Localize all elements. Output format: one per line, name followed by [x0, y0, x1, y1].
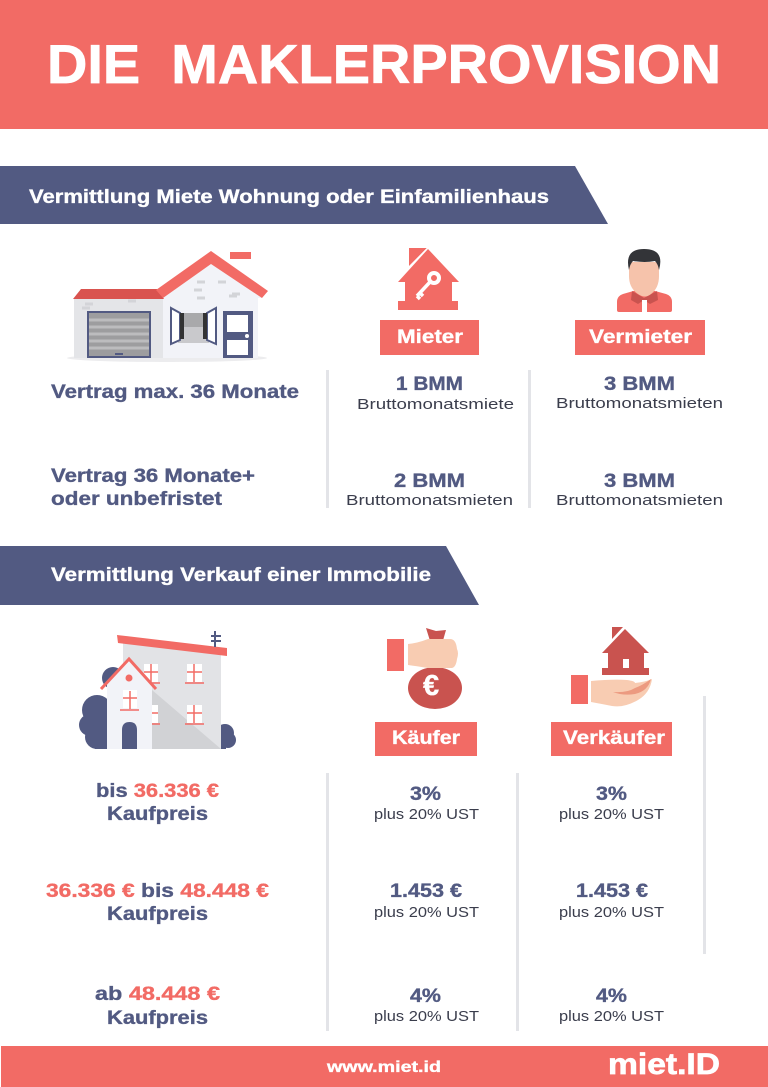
cell: Käufer 4%	[374, 986, 479, 1025]
section banner: Miete	[0, 166, 608, 224]
row label: Vertrag 36 Monate+: Vertrag 36 Monate+	[51, 466, 255, 487]
row label: ab 48.448 €: ab 48.448 €	[95, 984, 221, 1005]
section banner: Verkauf: Vermittlung Verkauf einer Immobilie	[51, 565, 431, 586]
title	[0, 0, 768, 129]
label: Käufer: Käufer	[392, 728, 461, 749]
label: Verkäufer: Verkäufer	[563, 728, 666, 749]
footer	[1, 1046, 768, 1087]
icon: landlord person	[617, 249, 672, 312]
cell: Käufer 1.453 €: plus 20% UST	[374, 904, 479, 921]
cell: Mieter short contract	[357, 374, 514, 413]
row label: bis 36.336 €	[96, 781, 219, 825]
cell: Vermieter long contract: 3 BMM	[604, 471, 675, 492]
label: Mieter: Mieter	[397, 327, 464, 348]
section banner: Verkauf	[0, 546, 479, 605]
cell: Käufer 3%: plus 20% UST	[374, 806, 479, 823]
cell: Käufer 1.453 €: 1.453 €	[390, 881, 462, 902]
row label: ab 48.448 €	[95, 984, 221, 1029]
cell: Verkäufer 1.453 €: 1.453 €	[576, 881, 648, 902]
label: Vermieter: Vermieter	[589, 327, 693, 348]
cell: Vermieter long contract	[556, 471, 723, 509]
label: Verkäufer	[551, 722, 672, 756]
cell: Vermieter long contract: Bruttomonatsmieten	[556, 492, 723, 509]
cell: Vermieter short contract: Bruttomonatsmieten	[556, 395, 723, 412]
footer: miet.ID	[608, 1048, 720, 1081]
row label: 36.336 € bis 48.448 €: Kaufpreis	[107, 904, 208, 925]
row label: 36.336 € bis 48.448 €: 36.336 € bis 48.448 €	[46, 881, 270, 902]
row label: Vertrag 36 Monate+	[51, 466, 255, 510]
cell: Mieter long contract	[346, 471, 513, 509]
cell: Käufer 3%	[374, 784, 479, 823]
icon: house with key	[398, 248, 459, 310]
icon: hand holding money bag	[387, 628, 462, 709]
cell: Verkäufer 1.453 €: plus 20% UST	[559, 904, 664, 921]
row label: 36.336 € bis 48.448 €	[46, 881, 270, 925]
cell: Mieter long contract: Bruttomonatsmieten	[346, 492, 513, 509]
icon: house with garage	[67, 251, 268, 362]
cell: Mieter long contract: 2 BMM	[394, 471, 465, 492]
row label: Vertrag max. 36 Monate: Vertrag max. 36 Monate	[51, 382, 299, 403]
cell: Käufer 1.453 €	[374, 881, 479, 921]
cell: Verkäufer 4%: plus 20% UST	[559, 1008, 664, 1025]
cell: Vermieter short contract: 3 BMM	[604, 374, 675, 395]
cell: Käufer 4%: plus 20% UST	[374, 1008, 479, 1025]
row label: Vertrag 36 Monate+: oder unbefristet	[51, 489, 223, 510]
cell: Käufer 4%: 4%	[410, 986, 441, 1007]
label: Käufer	[375, 722, 477, 756]
cell: Verkäufer 4%: 4%	[596, 986, 627, 1007]
cell: Vermieter short contract	[556, 374, 723, 412]
cell: Verkäufer 3%: plus 20% UST	[559, 806, 664, 823]
cell: Mieter short contract: 1 BMM	[396, 374, 463, 395]
row label: bis 36.336 €: bis 36.336 €	[96, 781, 219, 802]
row label: ab 48.448 €: Kaufpreis	[107, 1008, 208, 1029]
section banner: Miete: Vermittlung Miete Wohnung oder Einfamilienhaus	[29, 187, 549, 208]
icon: hand holding money bag: €	[423, 670, 439, 702]
cell: Verkäufer 4%	[559, 986, 664, 1025]
cell: Verkäufer 1.453 €	[559, 881, 664, 921]
title: DIE MAKLERPROVISION	[47, 33, 721, 95]
cell: Verkäufer 3%	[559, 784, 664, 823]
cell: Verkäufer 3%: 3%	[596, 784, 627, 805]
cell: Käufer 3%: 3%	[410, 784, 441, 805]
cell: Mieter short contract: Bruttomonatsmiete	[357, 396, 514, 413]
footer: www.miet.id	[326, 1059, 441, 1076]
label: Vermieter	[575, 320, 705, 355]
label: Mieter	[380, 320, 479, 355]
icon: hand holding house	[571, 627, 652, 706]
row label: bis 36.336 €: Kaufpreis	[107, 804, 208, 825]
icon: city house	[79, 631, 236, 749]
